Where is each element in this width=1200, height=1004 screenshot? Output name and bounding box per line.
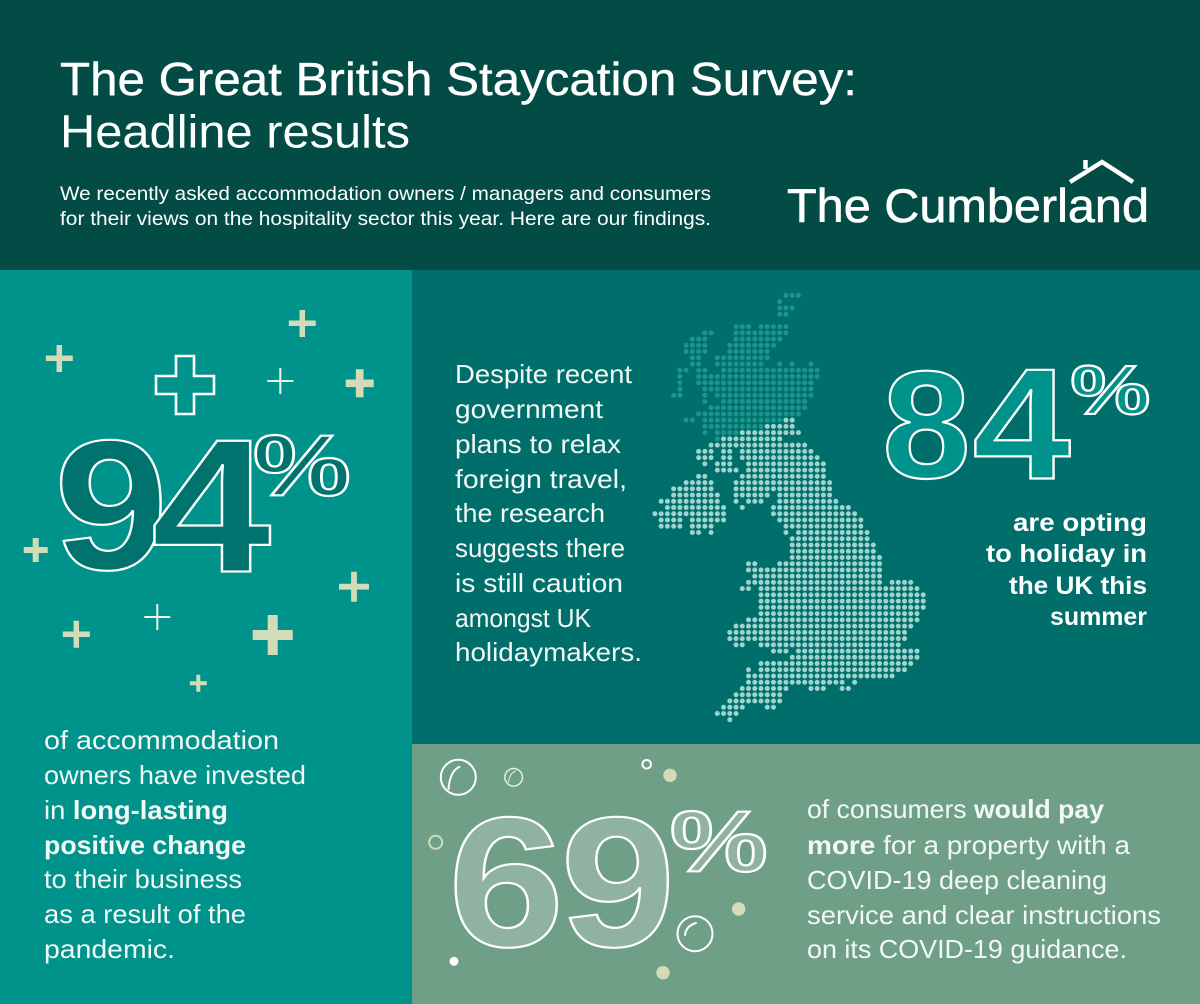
text: 84% statistic: the UK this xyxy=(1009,572,1147,600)
text: owners statistic: in long-lasting xyxy=(44,795,228,825)
big number: 69% xyxy=(448,778,768,986)
header panel xyxy=(0,0,1200,270)
text: research summary: suggests there xyxy=(455,533,625,563)
icon: thin plus signs xyxy=(144,368,293,630)
text: research summary: is still caution xyxy=(455,568,623,598)
icon: logo roof xyxy=(1070,160,1133,182)
text: consumers statistic: on its COVID-19 guidance. xyxy=(807,934,1127,964)
text: research summary xyxy=(455,359,642,667)
text: 84% statistic: to holiday in xyxy=(986,540,1147,568)
text: consumers statistic: service and clear instructions xyxy=(807,900,1161,930)
icons: soap bubbles xyxy=(429,760,745,979)
big number: 69%: 9 xyxy=(560,778,676,986)
big number: 69%: % xyxy=(670,794,768,890)
panel: 94% owners xyxy=(0,270,412,1004)
text: 84% statistic: summer xyxy=(1050,603,1147,631)
big number: 94% xyxy=(54,400,351,613)
big number: 69%: 6 xyxy=(448,778,564,985)
text: research summary: foreign travel, xyxy=(455,464,627,494)
text: consumers statistic: COVID-19 deep cleaning xyxy=(807,865,1107,895)
text: owners statistic xyxy=(44,725,306,964)
map region: Scotland xyxy=(674,295,817,439)
intro text: We recently asked accommodation owners / managers and consumers xyxy=(60,183,711,205)
icon: outlined plus xyxy=(156,356,214,414)
big number: 84%: % xyxy=(1070,352,1150,430)
title: Headline results xyxy=(60,106,410,158)
text: 84% statistic xyxy=(986,509,1147,631)
map region: England, Wales and Northern Ireland xyxy=(655,420,923,720)
big number: 94%: 4 xyxy=(151,400,271,613)
text: research summary: plans to relax xyxy=(455,429,621,459)
text: owners statistic: as a result of the xyxy=(44,899,246,929)
text: consumers statistic: of consumers would pay xyxy=(807,794,1105,824)
big number: 94%: 9 xyxy=(54,402,168,609)
text: research summary: holidaymakers. xyxy=(455,637,642,667)
text: research summary: Despite recent xyxy=(455,359,633,389)
panel: 69% consumers xyxy=(412,744,1200,1004)
text: owners statistic: pandemic. xyxy=(44,934,175,964)
icons: plus signs xyxy=(24,310,374,692)
text: owners statistic: to their business xyxy=(44,864,242,894)
big number: 84%: 8 xyxy=(882,340,971,511)
text: consumers statistic xyxy=(807,794,1161,964)
chart: dotted map of the UK xyxy=(655,295,923,720)
text: research summary: the research xyxy=(455,498,605,528)
big number: 94%: % xyxy=(253,418,351,514)
intro text: for their views on the hospitality sector this year. Here are our findings. xyxy=(60,208,711,230)
text: 84% statistic: are opting xyxy=(1013,509,1147,537)
title xyxy=(60,53,857,158)
big number: 84%: 4 xyxy=(973,337,1071,512)
logo: The Cumberland: The Cumberland xyxy=(787,179,1149,232)
text: owners statistic: positive change xyxy=(44,830,246,860)
text: owners statistic: of accommodation xyxy=(44,725,279,755)
intro text xyxy=(60,183,711,230)
panel: 84% UK holidays xyxy=(412,270,1200,744)
text: owners statistic: owners have invested xyxy=(44,760,306,790)
text: consumers statistic: more for a property with a xyxy=(807,830,1131,860)
text: research summary: amongst UK xyxy=(455,603,592,633)
text: research summary: government xyxy=(455,394,604,424)
title: The Great British Staycation Survey: xyxy=(60,53,857,105)
big number: 84% xyxy=(882,337,1150,512)
